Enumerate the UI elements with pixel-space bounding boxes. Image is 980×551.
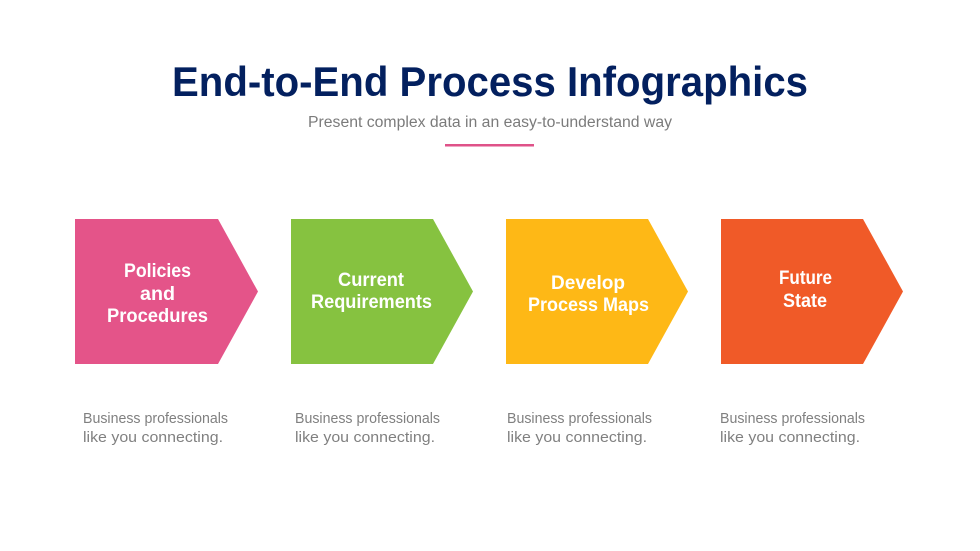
description 2 [295, 410, 440, 446]
label: current requirements: Requirements [311, 292, 432, 313]
description 3 [507, 410, 652, 446]
label: develop process maps [528, 273, 649, 316]
label: current requirements: Current [338, 270, 405, 291]
accent rule [445, 144, 534, 146]
description 1 [83, 410, 228, 446]
label: develop process maps: Develop [551, 273, 625, 294]
title: End-to-End Process Infographics [172, 58, 808, 105]
label: future state [779, 268, 832, 312]
label: policies and procedures [107, 261, 208, 327]
description 3: Business professionals [507, 410, 652, 427]
description 4 [720, 410, 865, 446]
label: future state: State [783, 291, 827, 312]
description 2: like you connecting. [295, 429, 435, 446]
label: current requirements [311, 270, 432, 313]
process step 3: develop process maps [506, 219, 688, 364]
label: policies and procedures: Procedures [107, 306, 208, 327]
process step 2: current requirements [291, 219, 473, 364]
process step 4: future state [721, 219, 903, 364]
description 4: like you connecting. [720, 429, 860, 446]
description 4: Business professionals [720, 410, 865, 427]
arrow: pink [75, 219, 258, 364]
arrow: green [291, 219, 473, 364]
description 3: like you connecting. [507, 429, 647, 446]
process step 1: policies and procedures [75, 219, 258, 364]
description 1: Business professionals [83, 410, 228, 427]
label: policies and procedures: and [140, 284, 175, 305]
description 1: like you connecting. [83, 429, 223, 446]
description 2: Business professionals [295, 410, 440, 427]
arrow: yellow [506, 219, 688, 364]
subtitle: Present complex data in an easy-to-understand way [308, 114, 672, 131]
arrow: orange [721, 219, 903, 364]
label: policies and procedures: Policies [124, 261, 191, 282]
label: develop process maps: Process Maps [528, 295, 649, 316]
label: future state: Future [779, 268, 832, 289]
